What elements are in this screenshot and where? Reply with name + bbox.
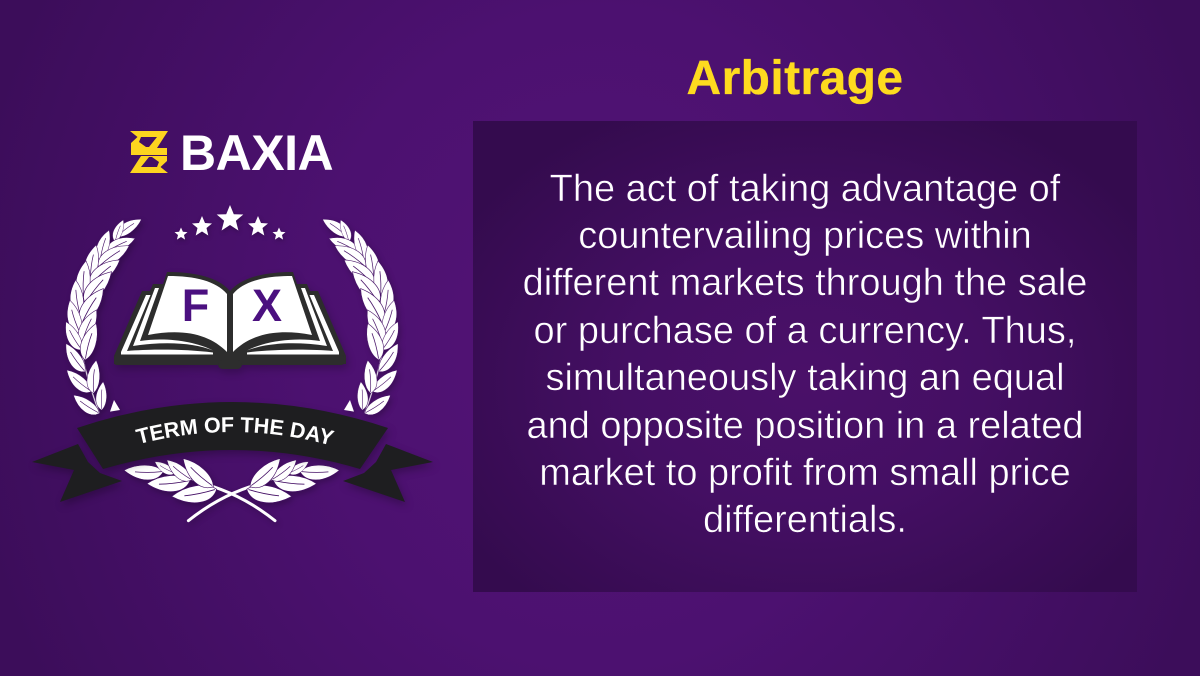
- laurel wreath left: [60, 214, 144, 419]
- text block: definition: or purchase of a currency. Thus,: [534, 310, 1076, 352]
- text block: definition: [523, 168, 1087, 541]
- ribbon label: TERM OF THE DAY: [135, 417, 335, 444]
- text block: definition: differentials.: [703, 499, 907, 541]
- logo: BAXIA: [130, 125, 333, 181]
- title: Arbitrage: Arbitrage: [686, 52, 903, 105]
- stars: [174, 205, 286, 240]
- text block: definition: different markets through the sale: [523, 262, 1087, 304]
- icon: open book: [114, 272, 346, 369]
- text block: definition: countervailing prices within: [578, 215, 1032, 257]
- laurel wreath right: [320, 214, 404, 419]
- text block: definition: and opposite position in a related: [526, 405, 1084, 447]
- icon: open book: X: [252, 280, 282, 331]
- panel: definition background: [473, 121, 1137, 592]
- badge: term of the day: [32, 205, 433, 523]
- text block: definition: The act of taking advantage of: [550, 168, 1060, 210]
- ribbon banner: [32, 402, 433, 502]
- lower laurel sprigs: [124, 454, 340, 521]
- icon: BAXIA mark: [130, 131, 168, 173]
- text block: definition: simultaneously taking an equal: [545, 357, 1065, 399]
- text block: definition: market to profit from small price: [539, 452, 1071, 494]
- book letters: F: [182, 280, 209, 331]
- wordmark: BAXIA: [180, 125, 333, 181]
